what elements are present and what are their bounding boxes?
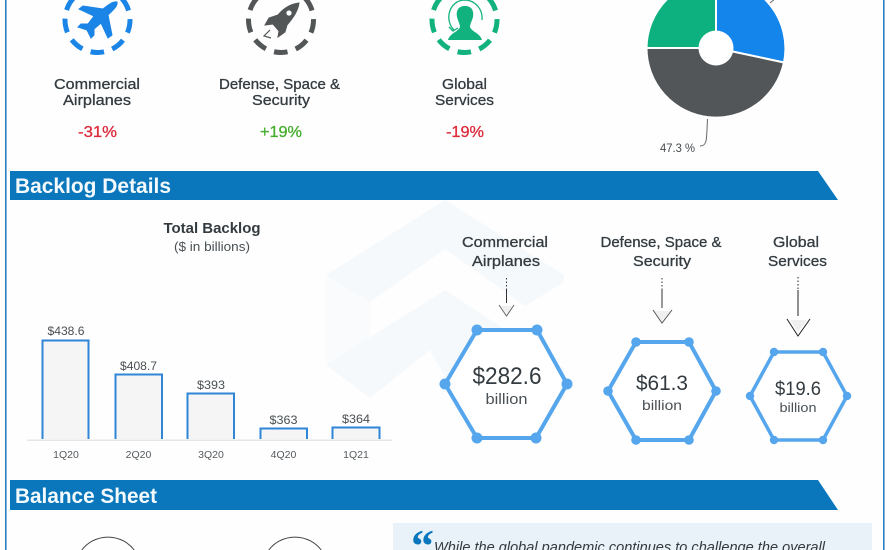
backlog: global services: Global bbox=[773, 234, 819, 251]
arrow bbox=[787, 277, 810, 336]
hexagon value bbox=[746, 348, 851, 444]
axis label: 4Q20 bbox=[271, 449, 297, 461]
chart title: Total Backlog bbox=[164, 220, 260, 237]
segment: commercial airplanes: Airplanes bbox=[63, 92, 131, 109]
segment: defense, space and security bbox=[219, 0, 340, 141]
arrow bbox=[653, 278, 672, 323]
heading: balance sheet bbox=[10, 480, 838, 510]
hexagon value: billion bbox=[642, 397, 682, 413]
value: +19%: +19% bbox=[260, 124, 302, 141]
backlog: defense, space and security: Defense, Space & bbox=[600, 234, 722, 251]
backlog: commercial airplanes bbox=[440, 234, 572, 444]
label: commercial airplanes: Commercial bbox=[54, 76, 140, 93]
right page border bbox=[883, 0, 885, 550]
heading: balance sheet: Balance Sheet bbox=[15, 485, 157, 508]
hexagon value: billion bbox=[486, 391, 528, 408]
hexagon value bbox=[603, 337, 721, 445]
backlog: global services: Services bbox=[768, 253, 827, 270]
backlog: defense, space and security bbox=[600, 234, 722, 445]
leader line bbox=[700, 119, 708, 146]
chart title: ($ in billions) bbox=[174, 239, 250, 254]
backlog: commercial airplanes: Airplanes bbox=[472, 253, 540, 270]
heading: backlog details: Backlog Details bbox=[15, 175, 171, 198]
balance circle left bbox=[82, 537, 134, 550]
hexagon value: $19.6 bbox=[775, 379, 821, 400]
donut chart bbox=[646, 0, 785, 155]
segment: commercial airplanes bbox=[54, 0, 140, 141]
bar value: $408.7 bbox=[120, 359, 157, 373]
quote panel bbox=[393, 520, 872, 550]
bar chart: total backlog bbox=[27, 324, 392, 461]
axis label: 1Q21 bbox=[343, 449, 369, 461]
label: defense, space and security: Defense, Space & bbox=[219, 76, 340, 93]
axis label: 3Q20 bbox=[198, 449, 224, 461]
segment: defense, space and security: Security bbox=[252, 92, 311, 109]
heading: backlog details bbox=[10, 171, 838, 200]
hexagon value: billion bbox=[780, 400, 816, 415]
segment: global services: Services bbox=[435, 92, 494, 109]
donut label: 47.3 % bbox=[660, 143, 695, 155]
hexagon value: $61.3 bbox=[636, 372, 688, 395]
value: -31%: -31% bbox=[78, 124, 117, 141]
arrow bbox=[499, 278, 514, 316]
balance circle right bbox=[269, 537, 321, 550]
left page border bbox=[5, 0, 7, 550]
bar value: $438.6 bbox=[48, 324, 85, 338]
backlog: global services bbox=[746, 234, 851, 444]
bar value: $364 bbox=[342, 412, 370, 426]
segment: global services bbox=[432, 0, 497, 141]
icon: airplane bbox=[65, 0, 130, 52]
chart title bbox=[164, 220, 260, 254]
axis label: 1Q20 bbox=[53, 449, 79, 461]
watermark logo bbox=[326, 200, 564, 420]
label: global services: Global bbox=[442, 76, 487, 93]
bar value: $363 bbox=[270, 413, 298, 427]
value: -19%: -19% bbox=[446, 124, 484, 141]
axis label: 2Q20 bbox=[126, 449, 152, 461]
backlog: commercial airplanes: Commercial bbox=[462, 234, 548, 251]
hexagon value bbox=[440, 324, 572, 444]
bar value: $393 bbox=[197, 378, 225, 392]
backlog: defense, space and security: Security bbox=[633, 253, 692, 270]
icon: person bbox=[432, 0, 497, 52]
icon: rocket bbox=[248, 0, 314, 52]
hexagon value: $282.6 bbox=[472, 363, 542, 390]
